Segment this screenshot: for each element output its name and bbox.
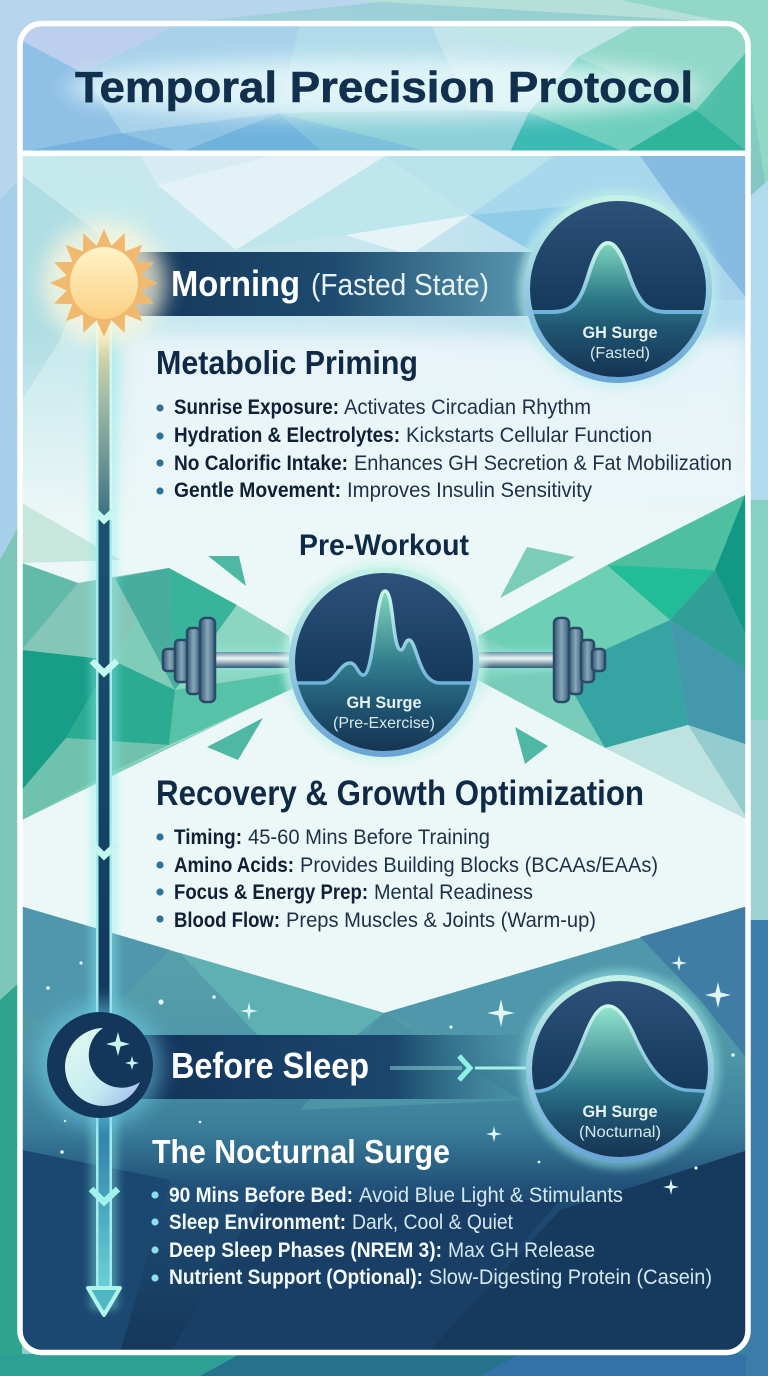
bullets: before sleep: 90 Mins Before Bed: <box>169 1183 353 1207</box>
arrowhead <box>88 1288 120 1315</box>
bullets: before sleep <box>151 1183 712 1289</box>
bullets: morning: Sunrise Exposure: <box>174 395 339 419</box>
icon: barbell <box>163 618 605 702</box>
gauge label: GH Surge <box>582 1102 658 1121</box>
morning band <box>130 252 540 316</box>
bullets: before sleep: Sleep Environment: <box>169 1210 346 1234</box>
bullets: morning: Improves Insulin Sensitivity <box>347 478 592 502</box>
chevron 2 <box>92 661 117 673</box>
heading: metabolic priming: Metabolic Priming <box>156 344 418 381</box>
bullets: morning: No Calorific Intake: <box>174 451 348 475</box>
bullets: before sleep: Deep Sleep Phases (NREM 3): <box>169 1238 442 1262</box>
stars <box>46 955 735 1195</box>
gauge sublabel: (Fasted) <box>590 345 650 362</box>
bullets: pre-workout: Focus & Energy Prep: <box>174 880 368 904</box>
bullets: pre-workout: 45-60 Mins Before Training <box>248 825 490 849</box>
bullets: morning: Enhances GH Secretion & Fat Mobilization <box>354 451 732 475</box>
morning panel background <box>22 156 746 503</box>
chevron 4 <box>91 1189 118 1202</box>
bullets: before sleep: Dark, Cool & Quiet <box>352 1210 513 1234</box>
before sleep band <box>140 1035 530 1099</box>
gauge sublabel: (Nocturnal) <box>579 1124 661 1141</box>
GH surge gauge: nocturnal <box>520 969 720 1170</box>
bullets: morning: Kickstarts Cellular Function <box>406 423 652 447</box>
bullets: pre-workout: Preps Muscles & Joints (Warm-up) <box>286 908 596 932</box>
bullets: morning: Gentle Movement: <box>174 478 341 502</box>
fasted state label: (Fasted State) <box>311 267 489 302</box>
header panel background <box>20 23 748 153</box>
icon: moon <box>38 1003 162 1127</box>
bullets: before sleep: Max GH Release <box>448 1238 595 1262</box>
bullets: pre-workout: Mental Readiness <box>374 880 533 904</box>
burst triangles <box>207 547 575 764</box>
icon: sun <box>42 221 166 345</box>
bullets: pre-workout: Blood Flow: <box>174 908 280 932</box>
bullets: morning <box>156 395 732 502</box>
bullets: pre-workout: Provides Building Blocks (BCAAs/EAAs) <box>300 853 658 877</box>
title: Temporal Precision Protocol <box>75 63 693 112</box>
pre-workout panel background <box>20 330 748 1030</box>
heading: recovery and growth: Recovery & Growth Optimization <box>156 774 644 813</box>
GH surge gauge: pre-exercise <box>283 561 485 770</box>
night panel background <box>20 906 748 1352</box>
chevron 1 <box>92 508 117 520</box>
bullets: before sleep: Avoid Blue Light & Stimulants <box>359 1183 623 1207</box>
bullets: before sleep: Slow-Digesting Protein (Casein) <box>429 1265 712 1289</box>
heading: the nocturnal surge: The Nocturnal Surge <box>152 1133 450 1170</box>
arrow: to nocturnal gauge <box>390 1056 529 1080</box>
bullets: before sleep: Nutrient Support (Optional): <box>169 1265 423 1289</box>
morning label: Morning <box>171 263 300 304</box>
bullets: pre-workout <box>156 825 658 932</box>
timeline: vertical arrow <box>88 320 120 1315</box>
bullets: morning: Activates Circadian Rhythm <box>344 395 591 419</box>
gauge label: GH Surge <box>346 693 422 712</box>
heading: pre-workout: Pre-Workout <box>299 529 469 562</box>
header divider <box>20 150 748 156</box>
gauge label: GH Surge <box>582 323 658 342</box>
gauge sublabel: (Pre-Exercise) <box>333 715 435 732</box>
bullets: morning: Hydration & Electrolytes: <box>174 423 400 447</box>
before sleep label: Before Sleep <box>171 1045 369 1086</box>
chevron 3 <box>92 844 117 856</box>
bullets: pre-workout: Timing: <box>174 825 242 849</box>
GH surge gauge: fasted <box>518 189 718 390</box>
bullets: pre-workout: Amino Acids: <box>174 853 294 877</box>
